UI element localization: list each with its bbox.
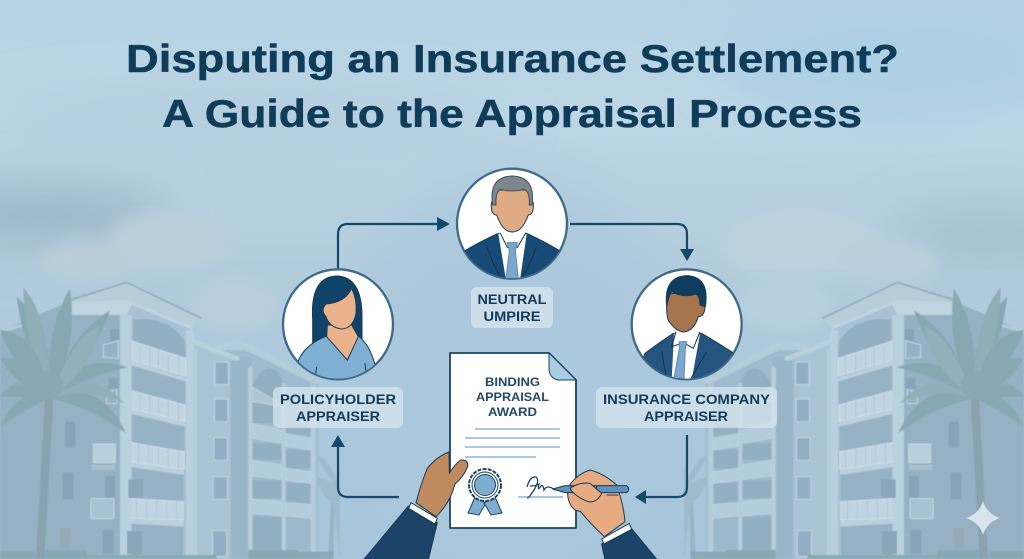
sparkle icon: [966, 501, 1000, 535]
right hand signing with pen: [553, 470, 657, 559]
portrait: insurance company appraiser: [632, 269, 742, 382]
seal ribbon: [468, 469, 502, 515]
document title: BINDING: [485, 375, 540, 389]
document text lines: [465, 429, 560, 457]
arrow: umpire to insurance appraiser: [570, 224, 694, 261]
document: binding appraisal award: [450, 353, 576, 528]
arrow: award to policyholder appraiser: [331, 435, 399, 497]
label: insurance company appraiser: INSURANCE COMPANY: [603, 392, 770, 407]
title: A Guide to the Appraisal Process: [162, 93, 862, 136]
document folded corner: [549, 353, 576, 380]
portrait: policyholder appraiser: [283, 269, 393, 382]
central fog: [322, 100, 702, 559]
arrow: policyholder to umpire: [338, 217, 450, 269]
left hand holding document: [363, 452, 468, 559]
pen: [553, 486, 629, 493]
label: insurance company appraiser: [596, 387, 777, 428]
label: policyholder appraiser: [273, 387, 403, 428]
haze over buildings: [0, 270, 1024, 559]
title: Disputing an Insurance Settlement?: [126, 38, 899, 81]
document title: AWARD: [488, 405, 537, 419]
arrow: insurance appraiser to award: [635, 435, 687, 504]
right condo building and palm: [684, 281, 1024, 559]
label: neutral umpire: NEUTRAL: [478, 292, 546, 307]
signature: [518, 477, 563, 498]
label: policyholder appraiser: POLICYHOLDER: [280, 392, 396, 407]
left condo building and palm: [0, 281, 340, 559]
label: policyholder appraiser: APPRAISER: [296, 409, 380, 424]
portrait: neutral umpire: [457, 169, 567, 282]
document title: [476, 375, 549, 419]
label: neutral umpire: UMPIRE: [484, 309, 540, 324]
label: neutral umpire: [471, 287, 553, 328]
label: insurance company appraiser: APPRAISER: [644, 409, 728, 424]
document title: APPRAISAL: [476, 390, 549, 404]
title: [126, 38, 899, 136]
